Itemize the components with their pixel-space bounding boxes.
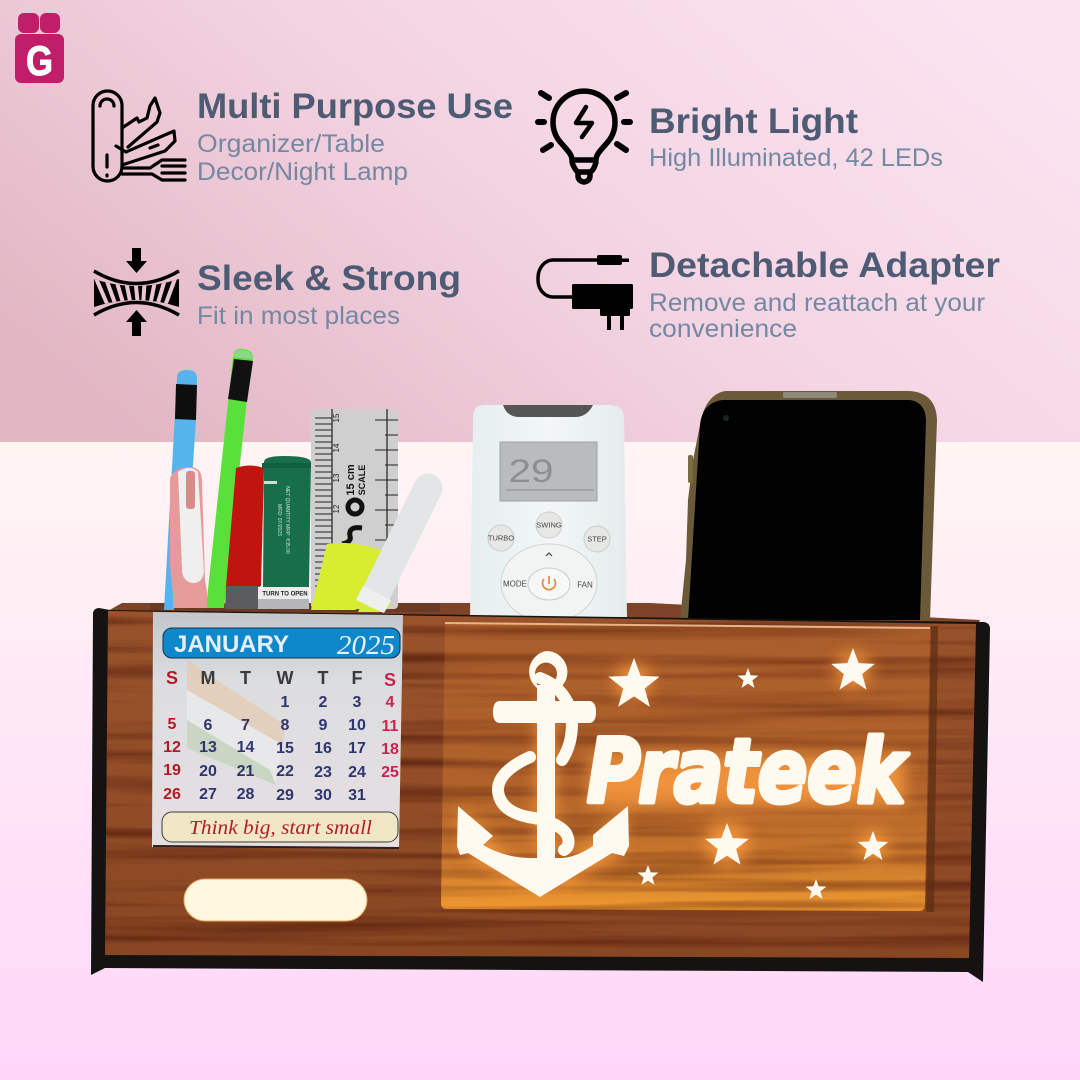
icon: compressed material with arrows	[94, 248, 179, 336]
green glue stick: MFD: 07/2023	[276, 504, 282, 536]
text: organizer table decor night lamp: Decor/Night Lamp	[197, 158, 408, 186]
remote buttons: STEP	[587, 534, 607, 544]
calendar dates: 2	[319, 694, 328, 711]
calendar dates: 8	[281, 717, 290, 734]
icon: light bulb	[538, 91, 630, 182]
calendar dates: 4	[386, 694, 395, 711]
feature: detachable adapter	[538, 246, 1000, 343]
background: upper pink band	[0, 0, 1080, 442]
smartphone	[680, 391, 937, 620]
icon: multi tool knife	[93, 91, 185, 181]
text: fit in most places: Fit in most places	[197, 302, 400, 330]
text: organizer table decor night lamp	[197, 130, 408, 186]
front wood face	[105, 611, 976, 958]
calendar dates: 3	[353, 694, 362, 711]
calendar dates: 18	[381, 741, 399, 758]
calendar dates: 24	[348, 764, 366, 781]
feature: multi purpose use	[93, 87, 513, 186]
calendar dates: 12	[163, 739, 181, 756]
calendar weekday row: S	[384, 670, 396, 690]
green pencil	[206, 349, 253, 608]
ruler label	[345, 464, 367, 496]
calendar header: 2025	[337, 630, 395, 660]
calendar	[152, 612, 403, 848]
calendar dates: 16	[314, 740, 332, 757]
icon: power adapter	[538, 255, 633, 330]
calendar dates: 15	[276, 740, 294, 757]
text: high illuminated: High Illuminated, 42 LEDs	[649, 144, 943, 172]
calendar dates: 27	[199, 786, 217, 803]
calendar weekday row: M	[200, 668, 216, 688]
calendar dates: 23	[314, 764, 332, 781]
calendar dates: 21	[237, 763, 254, 780]
remote buttons: FAN	[577, 580, 593, 590]
ruler numbers: 14	[332, 443, 341, 452]
calendar dates: 30	[314, 787, 332, 804]
ruler label: 15 cm	[345, 464, 357, 496]
feature: sleek and strong	[94, 248, 461, 336]
black side and bottom edges	[91, 608, 990, 982]
heading: multi purpose use: Multi Purpose Use	[197, 87, 513, 126]
back rim of box	[106, 603, 980, 628]
ruler numbers: 12	[332, 504, 341, 513]
background: lower pale band	[0, 442, 1080, 1080]
lit name panel	[441, 623, 938, 912]
logo: gift box G: G	[26, 37, 53, 84]
calendar dates: 11	[382, 718, 399, 735]
calendar dates: 29	[276, 787, 294, 804]
calendar weekday row: T	[318, 668, 328, 688]
calendar dates: 17	[348, 740, 366, 757]
green glue stick	[258, 456, 311, 609]
logo: gift box G	[15, 13, 64, 84]
calendar motto	[162, 812, 398, 842]
calendar weekday row	[166, 668, 396, 690]
calendar dates: 20	[199, 763, 217, 780]
remote buttons: SWING	[536, 520, 562, 530]
ruler numbers: 15	[332, 413, 341, 422]
wooden organizer box	[91, 608, 990, 982]
calendar dates: 28	[237, 786, 254, 803]
calendar weekday row: S	[166, 668, 178, 688]
calendar header: JANUARY	[174, 631, 289, 658]
calendar dates: 22	[276, 763, 294, 780]
ruler numbers	[332, 413, 341, 513]
name text: Prateek	[587, 720, 909, 823]
heading: sleek and strong: Sleek & Strong	[197, 259, 461, 298]
white marker	[356, 488, 428, 613]
feature: bright light	[538, 91, 943, 182]
calendar weekday row: T	[240, 668, 251, 688]
calendar dates: 13	[199, 739, 217, 756]
calendar header	[163, 628, 400, 660]
red marker	[225, 466, 264, 609]
panel glow	[459, 652, 905, 897]
remote buttons: TURBO	[488, 534, 514, 542]
text: remove and reattach	[649, 289, 985, 343]
calendar flag watermark	[187, 660, 285, 785]
ruler label: SCALE	[357, 465, 367, 495]
calendar dates: 14	[237, 739, 254, 756]
calendar dates: 31	[348, 787, 366, 804]
ruler	[311, 409, 398, 609]
calendar dates	[163, 694, 399, 804]
anchor cutout	[457, 651, 629, 897]
AC remote	[470, 405, 627, 622]
calendar dates: 9	[319, 717, 328, 734]
pink pen	[170, 467, 207, 608]
calendar weekday row: W	[276, 668, 294, 688]
calendar dates: 26	[163, 786, 181, 803]
stars	[608, 648, 888, 899]
blue pencil	[164, 370, 197, 610]
calendar dates: 25	[381, 764, 399, 781]
glowing slot	[184, 879, 367, 921]
green glue stick: NET QUANTITY MRP: ₹35.00	[284, 486, 290, 554]
calendar dates: 5	[168, 716, 177, 733]
remote display: 29	[508, 453, 554, 489]
calendar dates: 19	[163, 762, 181, 779]
text: remove and reattach: convenience	[649, 315, 797, 343]
heading: detachable adapter: Detachable Adapter	[649, 246, 1000, 285]
heading: bright light: Bright Light	[649, 102, 858, 141]
text: organizer table decor night lamp: Organizer/Table	[197, 130, 385, 158]
calendar dates: 1	[281, 694, 290, 711]
remote buttons	[488, 512, 610, 622]
green glue stick: TURN TO OPEN	[262, 592, 308, 598]
remote display	[500, 442, 597, 501]
calendar dates: 7	[241, 717, 250, 734]
calendar dates: 10	[348, 717, 366, 734]
yellow highlighter	[311, 543, 381, 610]
calendar dates: 6	[204, 717, 213, 734]
calendar weekday row: F	[352, 668, 362, 688]
ruler numbers: 13	[332, 473, 341, 482]
calendar motto: Think big, start small	[189, 817, 372, 839]
text: remove and reattach: Remove and reattach at your	[649, 289, 985, 317]
stationery group	[164, 349, 428, 613]
remote buttons: MODE	[503, 580, 527, 588]
